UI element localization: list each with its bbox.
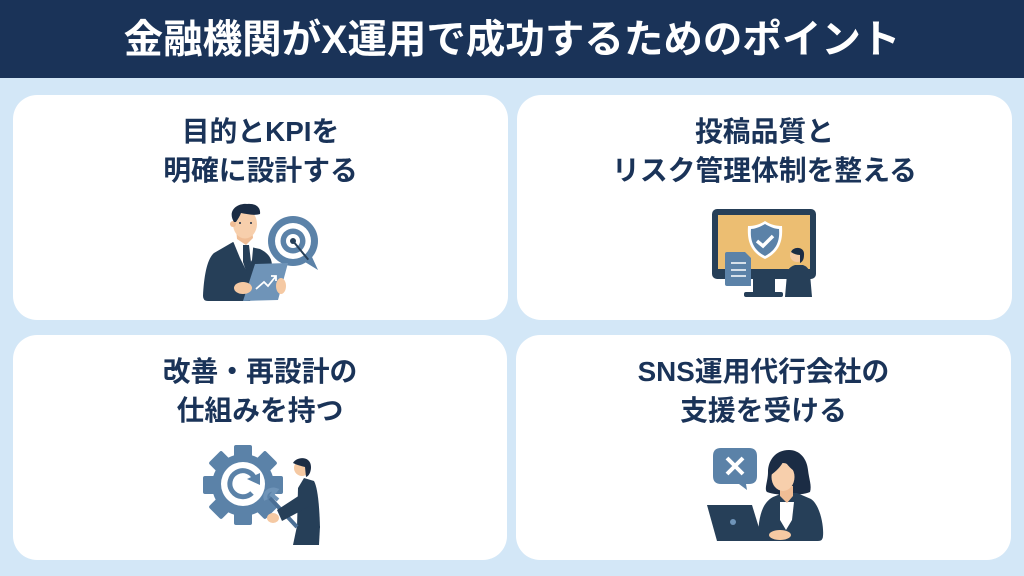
tablet <box>243 263 288 301</box>
hands <box>234 282 252 294</box>
hair <box>766 450 811 495</box>
heading: KPI design: 明確に設計する <box>163 155 358 186</box>
hair <box>232 204 260 222</box>
icon: businessman with target and tablet <box>203 204 318 301</box>
heading: agency support: SNS運用代行会社の <box>638 356 889 387</box>
gear <box>203 445 283 525</box>
laptop <box>707 505 763 541</box>
blouse <box>780 502 794 530</box>
hand <box>267 513 279 523</box>
shirt and tie <box>233 234 254 270</box>
shield <box>748 221 782 259</box>
heading: agency support: 支援を受ける <box>680 395 847 426</box>
heading: KPI design: 目的とKPIを <box>182 116 339 147</box>
heading: improvement: 改善・再設計の <box>163 356 357 387</box>
monitor <box>712 209 816 279</box>
icon: monitor with shield and person <box>712 209 816 297</box>
document <box>725 252 751 286</box>
body <box>758 493 823 541</box>
speech bubble <box>713 448 757 490</box>
person <box>785 265 812 297</box>
neck and face <box>294 460 310 476</box>
person <box>293 526 320 545</box>
neck and face <box>780 486 793 503</box>
heading: quality and risk: リスク管理体制を整える <box>612 155 917 186</box>
panel: KPI design <box>13 95 508 320</box>
target <box>268 216 318 270</box>
eyes <box>239 222 241 224</box>
heading: improvement: 仕組みを持つ <box>177 395 343 426</box>
icon: woman with laptop and speech bubble <box>707 448 824 541</box>
arm <box>277 495 310 521</box>
heading: improvement <box>163 356 357 426</box>
heading: agency support <box>638 356 889 426</box>
header band <box>0 0 1024 78</box>
title: 金融機関がX運用で成功するためのポイント <box>124 18 900 62</box>
hands <box>769 530 791 540</box>
panel: agency support <box>516 335 1011 560</box>
body <box>203 242 272 301</box>
heading: KPI design <box>163 116 358 186</box>
refresh arrow <box>230 471 255 497</box>
heading: quality and risk <box>612 116 917 186</box>
neck and face <box>236 228 253 245</box>
heading: quality and risk: 投稿品質と <box>695 116 834 147</box>
panel: improvement <box>13 335 507 560</box>
wrench <box>270 498 297 527</box>
icon: gear and person with wrench <box>203 445 320 545</box>
panel: quality and risk <box>517 95 1012 320</box>
